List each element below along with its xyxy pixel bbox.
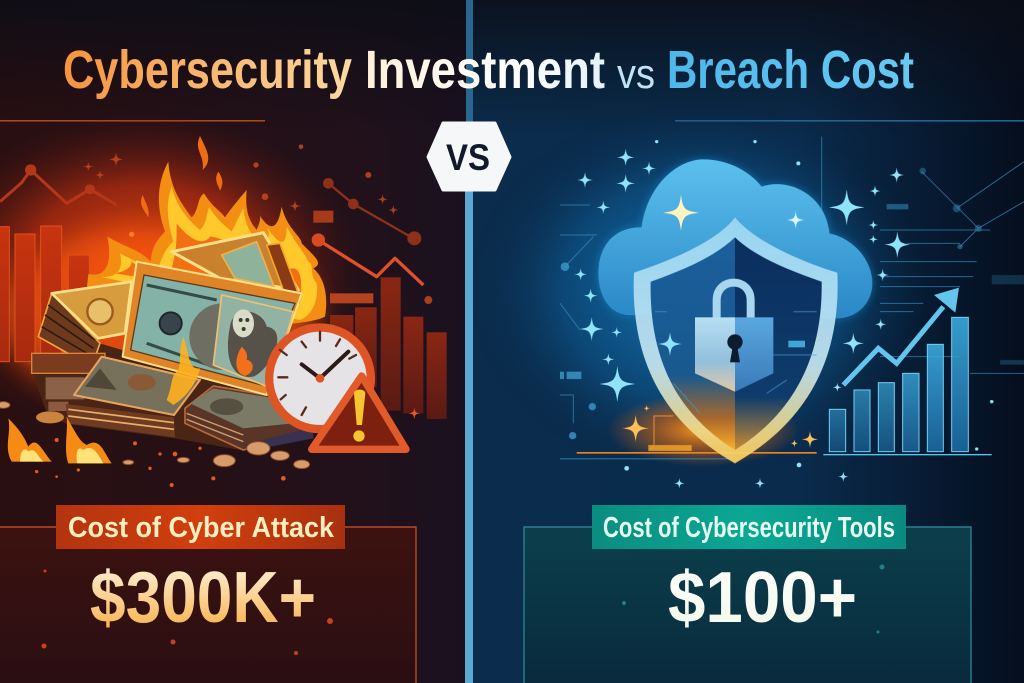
title word: Breach Cost: Breach Cost bbox=[667, 40, 914, 100]
red bar chart left bbox=[0, 226, 89, 362]
VS hexagon badge bbox=[428, 123, 510, 190]
large flame bbox=[87, 136, 326, 325]
padlock bbox=[695, 283, 773, 392]
value: $100+: $100+ bbox=[668, 558, 857, 638]
label: cost of cyber attack bbox=[56, 505, 345, 549]
growth bar chart bbox=[829, 317, 968, 452]
cloud bbox=[598, 159, 872, 318]
title word: vs: vs bbox=[617, 50, 655, 97]
falling trend lines bbox=[0, 170, 423, 285]
label: cost of cybersecurity tools bbox=[592, 505, 906, 549]
panel sparks bbox=[622, 564, 884, 634]
coins bbox=[0, 402, 310, 469]
shield frame bbox=[634, 217, 838, 463]
circuit lines bbox=[560, 137, 1024, 423]
chart markers bbox=[25, 164, 421, 303]
orange glow under shield bbox=[560, 393, 818, 467]
header rule: left bbox=[0, 120, 265, 122]
illustration: cloud shield security bbox=[470, 103, 1024, 489]
lower right bill stack bbox=[185, 386, 315, 450]
VS text: VS bbox=[446, 137, 490, 178]
cost panel: cyber attack bbox=[0, 505, 416, 683]
background stars bbox=[574, 140, 993, 489]
label: cost of cybersecurity tools: Cost of Cybersecurity Tools bbox=[603, 512, 895, 544]
clock bbox=[265, 323, 375, 433]
small flames on money bbox=[167, 337, 200, 405]
title bbox=[63, 40, 914, 100]
panel box bbox=[524, 527, 971, 683]
shield right half bbox=[735, 237, 822, 450]
header rule: right bbox=[675, 120, 1024, 122]
money pile backing bbox=[32, 343, 315, 451]
data blocks and nodes bbox=[560, 168, 1024, 439]
lower left base stack bbox=[32, 353, 105, 423]
label: cost of cyber attack: Cost of Cyber Attack bbox=[68, 512, 335, 544]
cloud sparkles bbox=[663, 195, 804, 231]
shield interior marks bbox=[658, 332, 805, 356]
title word: Cybersecurity: Cybersecurity bbox=[63, 40, 352, 100]
title word: Investment: Investment bbox=[365, 40, 605, 100]
value: $300K+: $300K+ bbox=[90, 558, 316, 638]
cost panel: cybersecurity tools bbox=[524, 505, 971, 683]
panel sparks bbox=[42, 570, 333, 655]
rear bills bbox=[172, 233, 298, 293]
center divider bbox=[465, 0, 473, 683]
chart baseline bbox=[823, 454, 992, 455]
lower bill stack bbox=[66, 357, 200, 437]
ground flames bbox=[8, 417, 112, 463]
shield left half bbox=[651, 237, 735, 450]
panel: attack background bbox=[0, 0, 467, 683]
background glow bbox=[0, 113, 363, 433]
panel box bbox=[0, 527, 416, 683]
ember sparks bbox=[35, 407, 420, 487]
illustration: burning money bbox=[0, 113, 447, 487]
red bar chart right bbox=[330, 277, 447, 419]
panel: tools background bbox=[467, 0, 1024, 683]
shield bbox=[634, 217, 838, 463]
left bill stack bbox=[38, 282, 132, 367]
front burning bill bbox=[123, 262, 302, 395]
warning triangle bbox=[312, 376, 406, 449]
background glow bbox=[470, 103, 930, 477]
sparks bbox=[83, 144, 432, 304]
shield circuit details bbox=[655, 312, 817, 413]
top shading band bbox=[0, 0, 1024, 135]
growth arrow bbox=[843, 288, 959, 385]
